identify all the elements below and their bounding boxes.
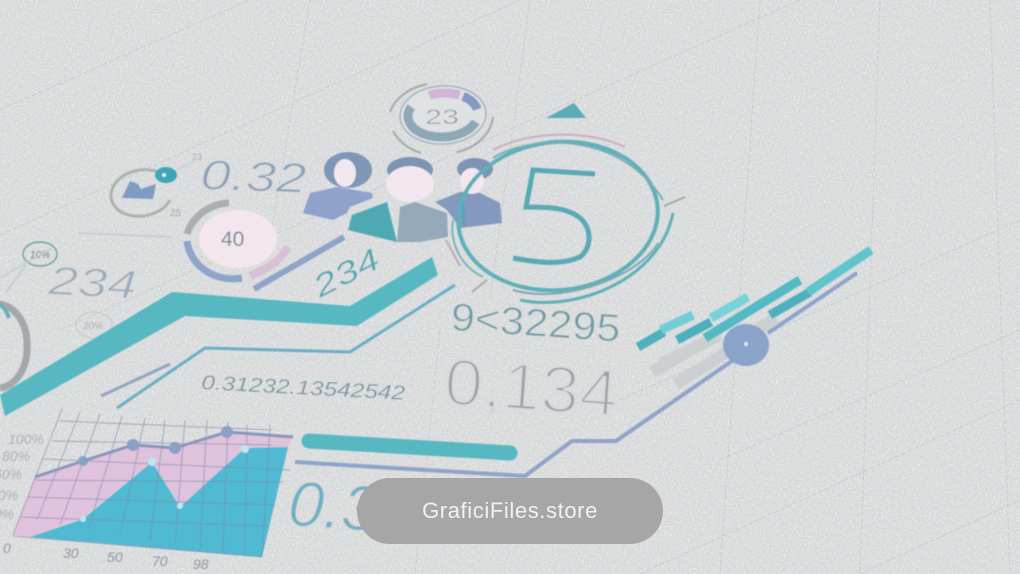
blue node on line xyxy=(723,324,769,366)
chart y axis labels: 80% xyxy=(2,448,30,464)
area chart xyxy=(0,409,293,572)
20% badge xyxy=(76,312,112,338)
chart x axis labels: 50 xyxy=(107,549,123,565)
gauge with value 40 xyxy=(187,203,288,279)
person center xyxy=(348,157,448,242)
value 0.3 cut off by pill: 0.3 xyxy=(286,467,380,545)
chart x axis labels: 30 xyxy=(63,545,79,561)
chart x axis labels: 98 xyxy=(193,556,209,572)
chart x axis labels xyxy=(3,540,209,572)
donut chart with value 23 xyxy=(390,84,493,153)
thin blue trend line xyxy=(117,285,455,408)
stepped bars xyxy=(638,250,871,384)
purple diagonal bar xyxy=(254,237,344,289)
chart grid xyxy=(13,409,290,557)
chart x axis labels: 70 xyxy=(152,553,168,569)
value 0,134: 0,134 xyxy=(442,344,621,430)
triangle marker xyxy=(546,103,586,118)
gauge with value 40: 40 xyxy=(221,228,244,251)
value 0.32: 0.32 xyxy=(200,151,307,202)
small donut icon with folder: 25 xyxy=(170,208,182,219)
chart lower markers xyxy=(80,445,249,522)
teal rounded bar xyxy=(309,441,510,453)
diagonal value 234 teal: 234 xyxy=(306,241,386,305)
person left xyxy=(303,152,373,220)
chart x axis labels: 0 xyxy=(3,540,11,556)
value 234 grey: 234 xyxy=(46,259,138,308)
person right xyxy=(435,158,502,228)
small donut icon with folder: 23 xyxy=(192,152,202,162)
long purple line rising to right xyxy=(295,361,732,476)
watermark pill xyxy=(357,478,663,544)
left cut-off gauge xyxy=(0,304,27,388)
short purple line xyxy=(101,364,170,396)
chart y axis labels: 100% xyxy=(8,431,44,447)
number string 9-32295: 9<32295 xyxy=(449,296,622,351)
donut chart with value 23: 23 xyxy=(425,106,459,129)
thick teal trend band xyxy=(0,257,438,416)
big circle with number 5 xyxy=(446,132,685,302)
small donut icon with folder xyxy=(111,152,202,219)
10% badge and leader lines: 10% xyxy=(30,250,50,261)
20% badge: 20% xyxy=(82,321,103,332)
chart pink area xyxy=(13,432,293,537)
chart y axis labels xyxy=(0,431,44,522)
watermark pill: GraficiFiles.store xyxy=(422,498,598,523)
left gauge teal arc xyxy=(0,304,9,318)
chart teal area xyxy=(30,447,288,557)
people icons xyxy=(303,152,502,242)
10% badge and leader lines xyxy=(0,233,172,292)
chart upper line and markers xyxy=(35,426,293,477)
number string 0.31232.13542542: 0.31232.13542542 xyxy=(201,372,406,405)
